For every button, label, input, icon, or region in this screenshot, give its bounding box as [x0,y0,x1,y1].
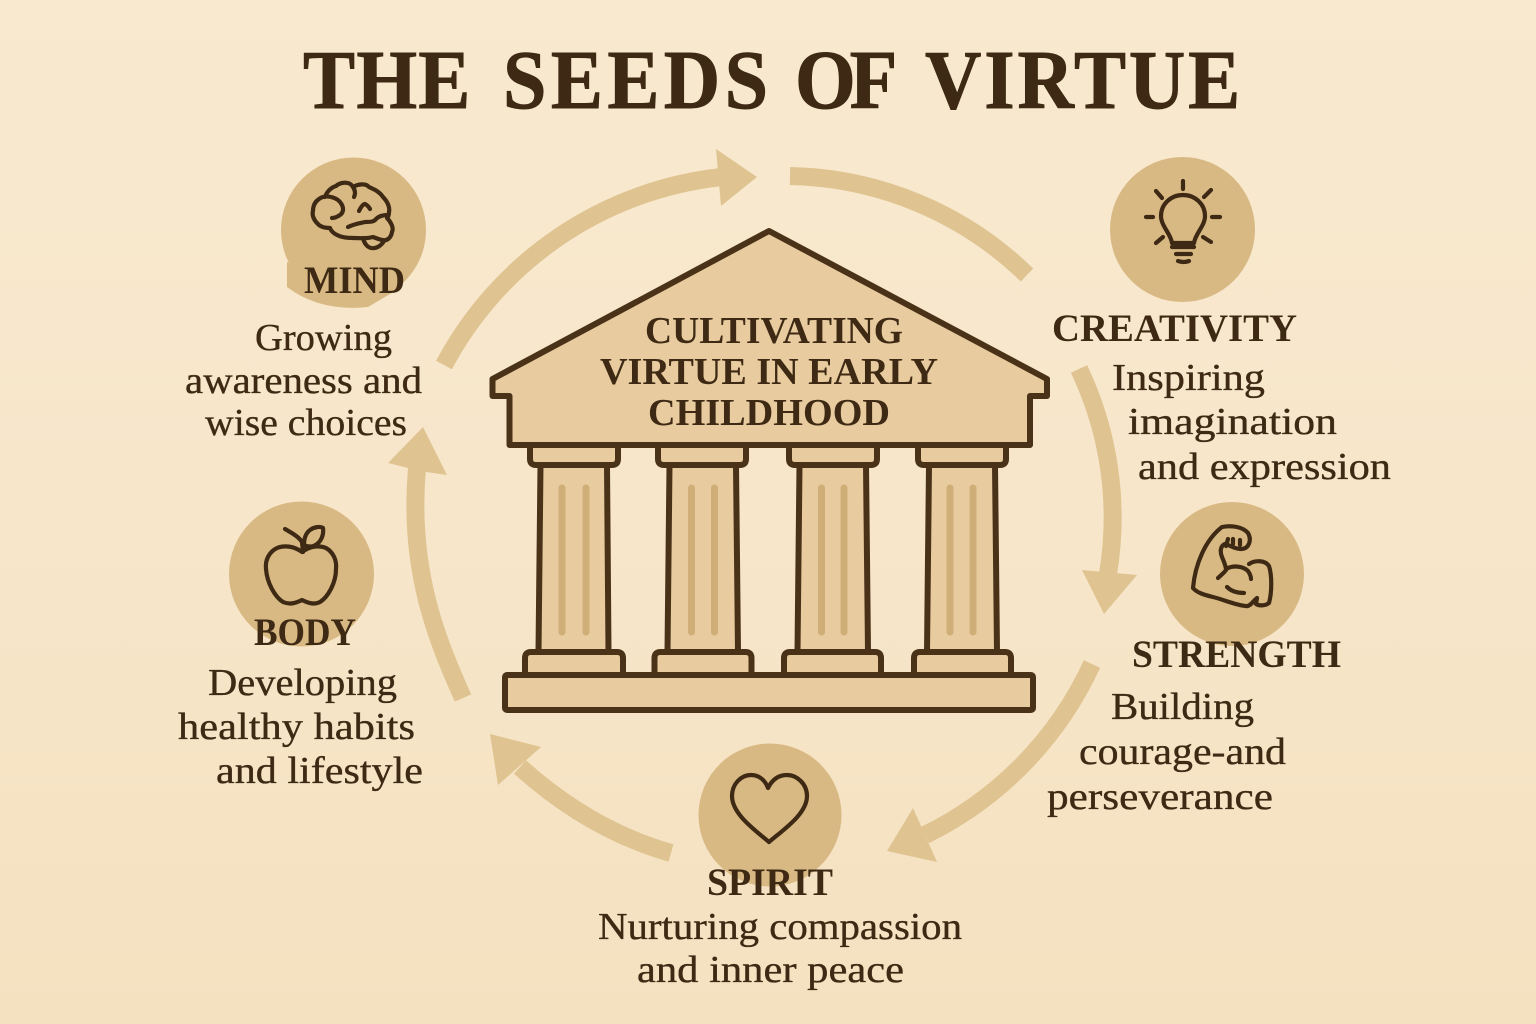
panel: mind [185,158,426,444]
label: body: BODY [254,611,356,654]
text: body description: Developing [208,662,397,704]
arrow: cycle ring [388,149,1137,862]
title: SEEDS [503,33,768,127]
icon: flexed arm [1160,502,1304,646]
temple base [505,675,1033,710]
text: mind description: wise choices [205,402,407,444]
label: mind: MIND [304,259,405,302]
column 1 [525,445,623,675]
temple heading: CHILDHOOD [648,392,890,434]
text: strength description: courage-and [1079,731,1286,773]
arrow: mind to top [444,149,757,365]
icon: heart [698,744,842,886]
icon: light bulb [1110,157,1255,302]
column 2 [654,445,752,675]
text: strength description: perseverance [1047,776,1273,818]
title: THE [303,33,470,127]
temple heading [600,310,938,434]
title [303,33,1240,127]
text: creativity description: and expression [1138,446,1391,488]
arrow: body to mind [388,427,463,698]
temple [492,231,1047,710]
text: spirit description [598,906,962,991]
title: OF [795,33,897,127]
arrow: top to creativity [790,176,1027,275]
label: strength: STRENGTH [1132,633,1341,676]
panel: body [178,502,423,792]
text: creativity description [1112,357,1391,488]
panel: spirit [598,744,962,991]
arrow: creativity to strength [1079,369,1137,614]
text: strength description: Building [1111,686,1254,728]
text: mind description: Growing [255,317,392,359]
arrow: strength to spirit [887,664,1092,862]
column 4 [914,445,1011,675]
temple roof [492,231,1047,445]
arrow: spirit to body [490,734,671,853]
text: body description [178,662,423,792]
column 3 [784,445,881,675]
text: creativity description: Inspiring [1112,357,1265,399]
text: mind description: awareness and [185,360,422,402]
text: mind description [185,317,422,444]
icon: apple [229,502,374,646]
panel: strength [1047,502,1341,818]
temple heading: VIRTUE IN EARLY [600,351,938,393]
text: body description: and lifestyle [216,750,423,792]
label: spirit: SPIRIT [707,861,833,904]
text: creativity description: imagination [1128,401,1337,443]
title: VIRTUE [925,33,1240,127]
panel: creativity [1052,157,1391,488]
icon: brain [281,158,426,308]
text: body description: healthy habits [178,706,415,748]
text: spirit description: Nurturing compassion [598,906,962,948]
label: creativity: CREATIVITY [1052,307,1297,350]
temple heading: CULTIVATING [645,310,903,352]
text: strength description [1047,686,1286,818]
text: spirit description: and inner peace [637,949,904,991]
